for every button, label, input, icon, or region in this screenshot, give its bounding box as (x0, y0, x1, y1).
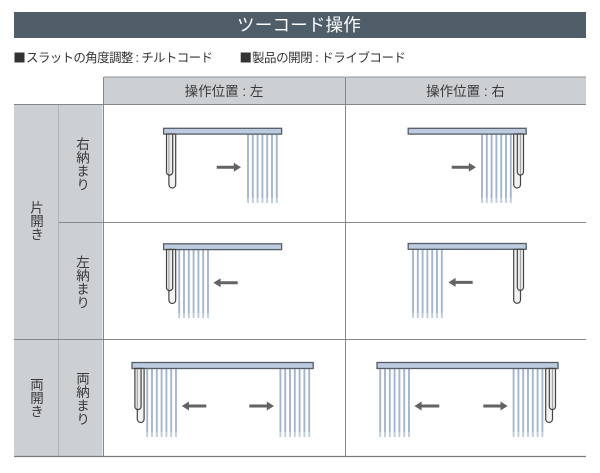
title band (14, 12, 586, 38)
row label: right stack (60, 105, 102, 222)
row label: right stack: 右納まり (74, 137, 90, 191)
diagram: right control, left stack (408, 244, 526, 318)
diagram: left control, left stack (164, 244, 282, 318)
row group: one-way opening (14, 105, 58, 339)
diagram: left control, split stack (132, 362, 313, 437)
title band: ツーコード操作 (237, 15, 361, 35)
diagram: right control, right stack (408, 128, 526, 203)
row label: both-side stack: 両納まり (74, 372, 90, 426)
table header: operating position right: 操作位置 : 右 (426, 84, 505, 99)
row label: left stack: 左納まり (74, 255, 90, 309)
diagram: left control, right stack (164, 128, 282, 203)
table header: operating position left (104, 76, 345, 104)
table header: operating position right (346, 76, 586, 104)
row group: two-way opening (14, 340, 58, 456)
legend: tilt cord: スラットの角度調整 : チルトコード (26, 50, 213, 65)
diagram: right control, split stack (377, 362, 558, 437)
row label: both-side stack (60, 340, 102, 456)
table header: operating position left: 操作位置 : 左 (185, 84, 263, 99)
legend: drive cord: 製品の開閉 : ドライブコード (252, 50, 406, 65)
row group: one-way opening: 片開き (28, 201, 44, 242)
row label: left stack (60, 223, 102, 339)
row group: two-way opening: 両開き (28, 378, 44, 419)
